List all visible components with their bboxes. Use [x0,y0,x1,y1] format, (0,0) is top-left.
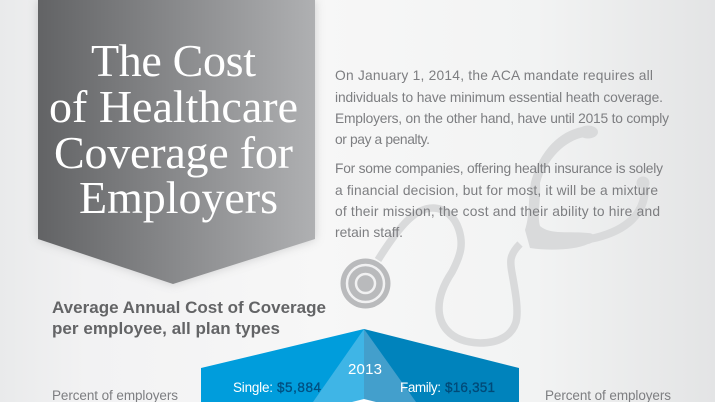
single cost label [233,380,321,395]
year label: 2013 [348,361,382,378]
intro paragraph 1: On January 1, 2014, the ACA mandate requires all [335,68,653,83]
white apex of next tier [352,399,376,402]
title [49,35,298,223]
title: of Healthcare [49,81,298,132]
intro paragraph 1: individuals to have minimum essential heath coverage. [335,90,663,105]
intro paragraph 2 [335,161,663,240]
left wing [201,329,364,402]
intro paragraph 2: of their mission, the cost and their ability to hire and [335,204,660,219]
intro paragraph 1: or pay a penalty. [335,132,430,147]
title: Coverage for [54,127,293,178]
left ear tip [578,126,598,138]
banner shape [34,0,319,287]
chest piece [340,258,390,308]
title: Employers [79,172,278,223]
chart heading [52,298,326,338]
intro paragraph 2: a financial decision, but for most, it will be a mixture [335,183,658,198]
inner left facet [313,329,364,402]
right arm [590,188,645,239]
chart heading: Average Annual Cost of Coverage [52,298,326,317]
inner right facet [364,329,416,402]
family cost label: Family: [400,380,441,395]
right wing [364,329,519,402]
single cost label: Single: [233,380,273,395]
intro paragraph 2: retain staff. [335,225,403,240]
tube [378,208,520,343]
headset [525,127,594,250]
family cost label [400,380,495,395]
chart heading: per employee, all plan types [52,319,280,338]
title: The Cost [91,35,256,86]
right ear tip [636,176,650,190]
intro paragraph 2: For some companies, offering health insurance is solely [335,161,663,176]
intro paragraph 1: Employers, on the other hand, have until 2015 to comply [335,111,669,126]
single cost label: $5,884 [277,380,321,395]
family cost label: $16,351 [445,380,495,395]
intro paragraph 1 [335,68,669,147]
